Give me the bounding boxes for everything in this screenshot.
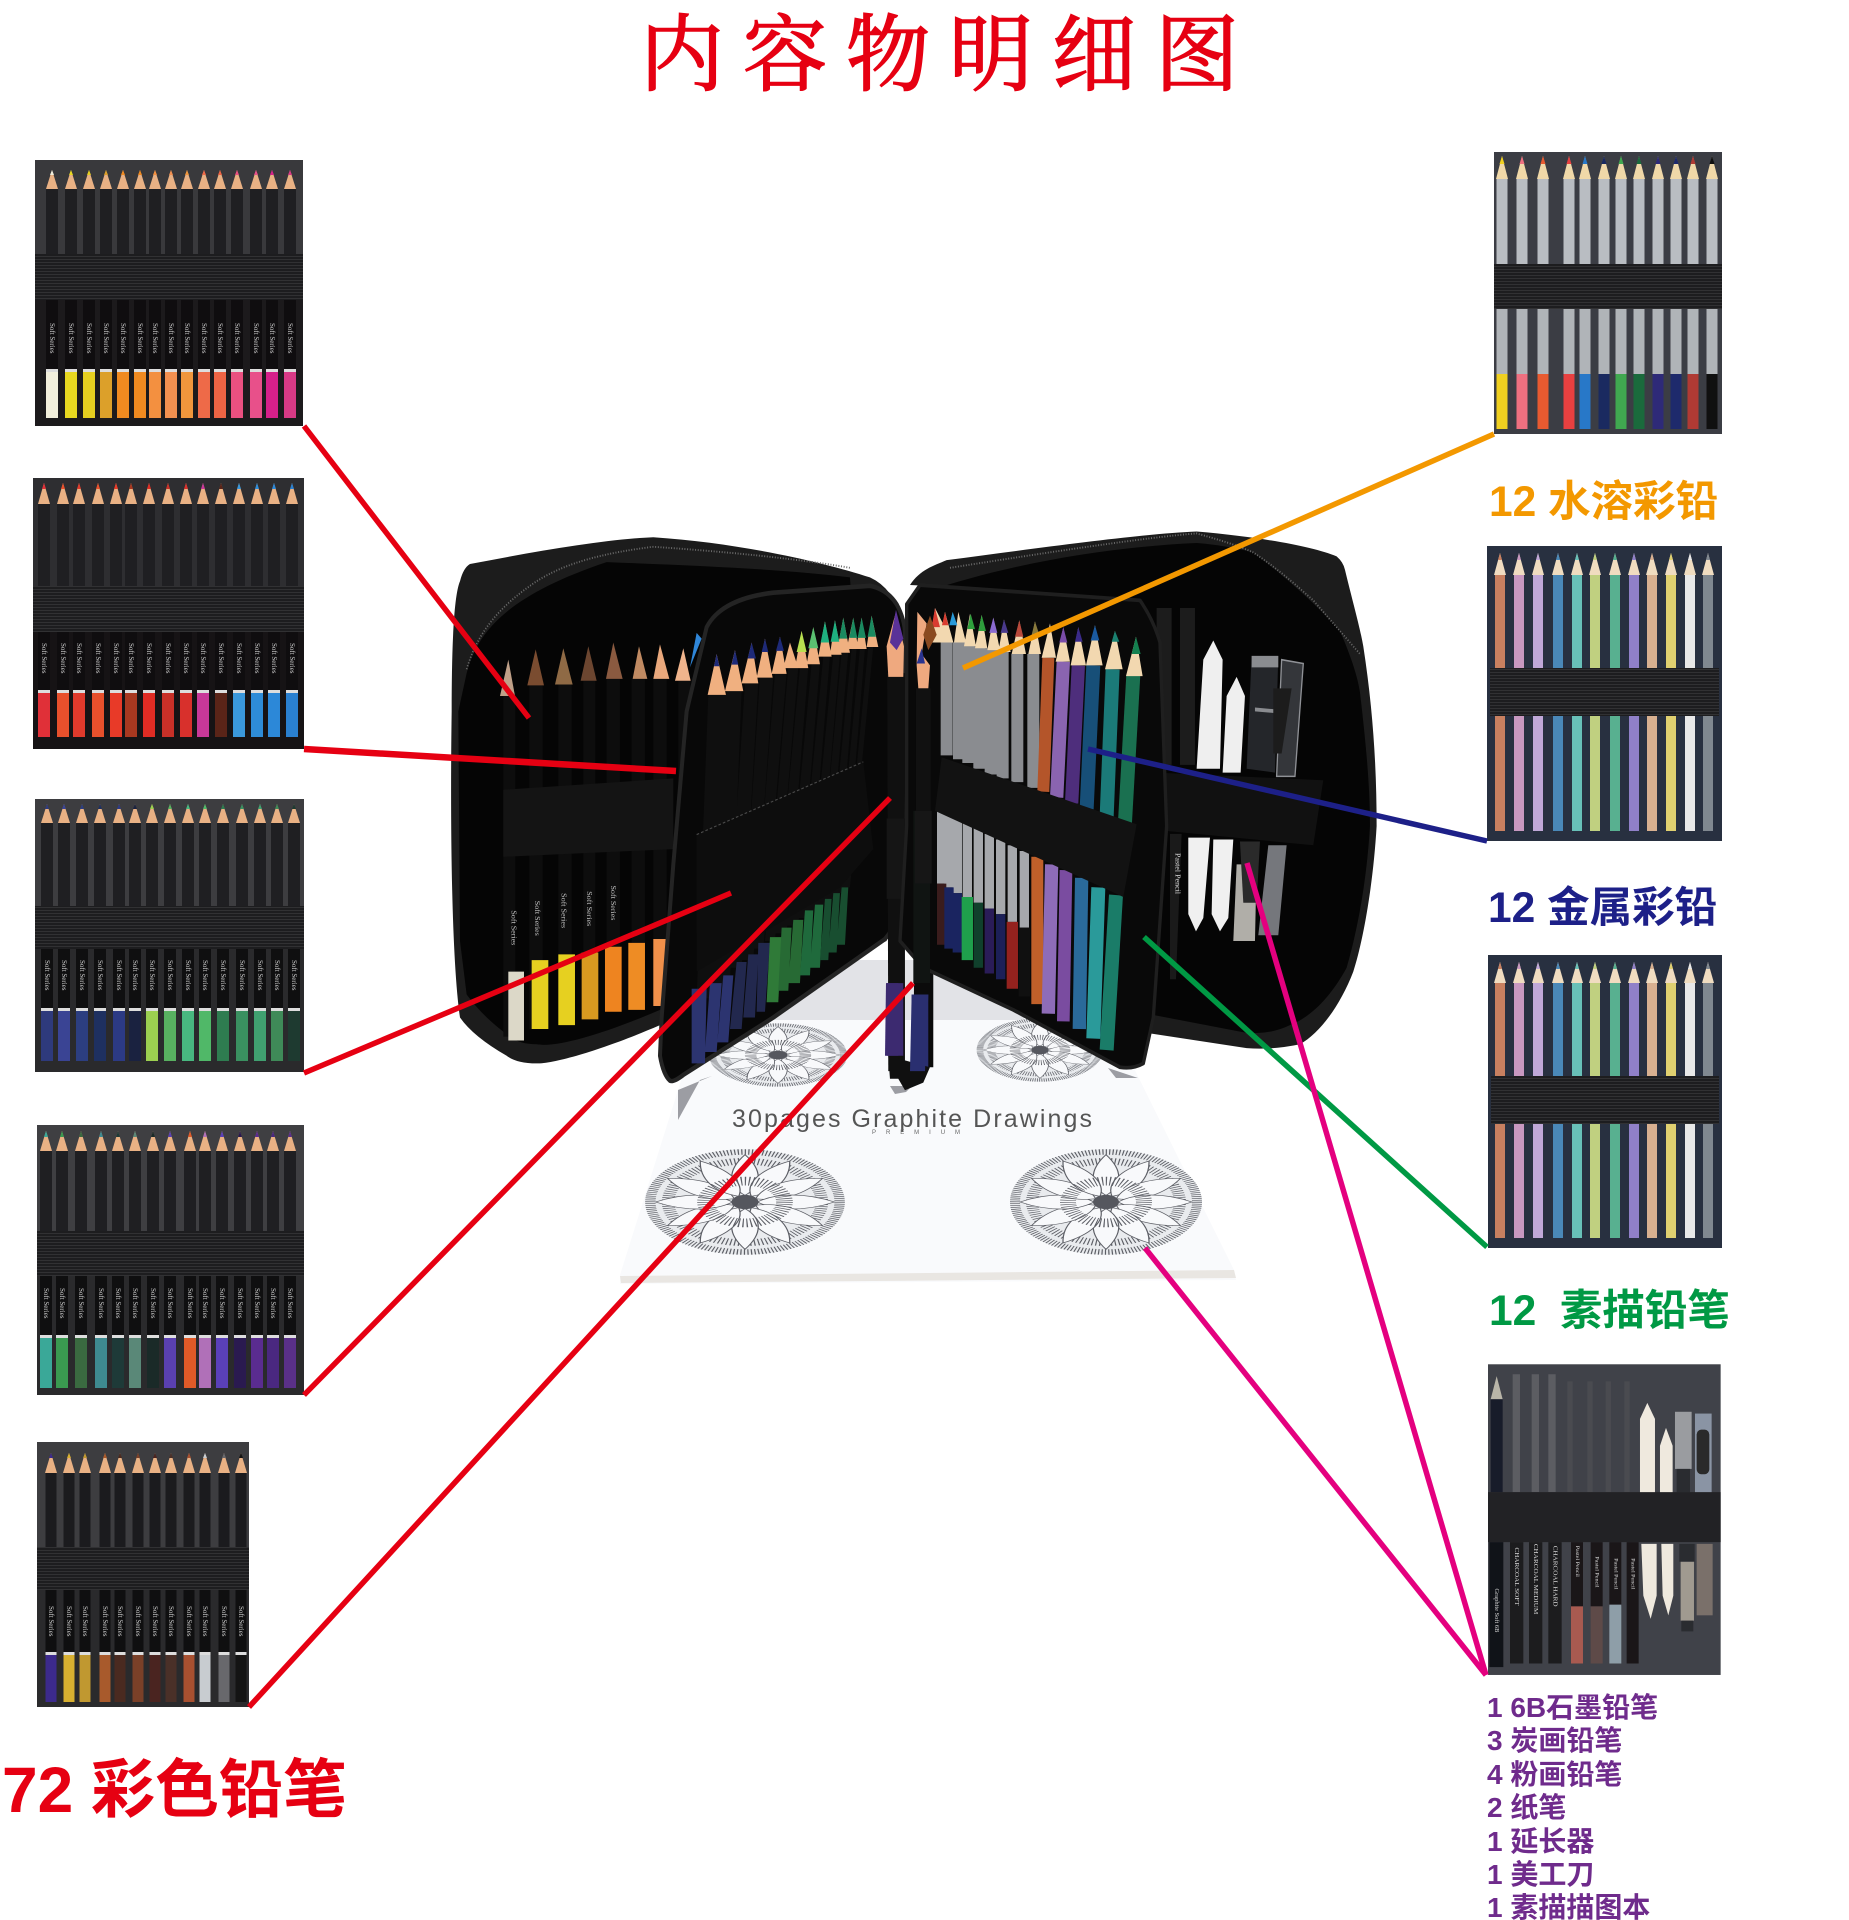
pencil labels: Soft Series	[40, 643, 48, 674]
panel: sketch tools	[1488, 1364, 1721, 1675]
case back	[451, 537, 897, 1063]
pencil labels: Soft Series	[114, 1288, 122, 1319]
title: 内容物明细图	[640, 10, 1258, 103]
tools compartment	[1152, 608, 1303, 979]
pencil labels: Soft Series	[201, 960, 209, 991]
pencil labels: Soft Series	[201, 1606, 209, 1637]
pencil labels: Soft Series	[81, 1606, 89, 1637]
paper stumps	[1640, 1403, 1673, 1619]
list: sketch tools contents: 1 延长器	[1487, 1826, 1594, 1857]
elastic band	[35, 254, 303, 300]
pencil labels: Soft Series	[166, 960, 174, 991]
pencil case: left side	[451, 537, 940, 1090]
pastel pencils: Pastel Pencil	[1574, 1546, 1580, 1577]
label: 12 metallic pencils: 12 金属彩铅	[1488, 885, 1717, 932]
panel: colored pencils teal to purple	[37, 1125, 304, 1395]
elastic band	[33, 586, 304, 632]
pencil labels: Soft Series	[286, 323, 294, 354]
panel: metallic pencils	[1487, 546, 1722, 841]
label: 12 watercolor pencils: 12 水溶彩铅	[1489, 479, 1718, 526]
spine pencil	[885, 811, 932, 1071]
pencil labels	[40, 643, 296, 674]
craft knife	[1695, 1414, 1713, 1615]
elastic band	[1488, 1492, 1721, 1542]
pencil labels: Soft Series	[236, 1288, 244, 1319]
leader line: set 5 to case	[249, 983, 913, 1707]
graphite pencil: Graphite Soft 6B	[1493, 1589, 1500, 1632]
pencil labels: Soft Series	[219, 960, 227, 991]
center spine pencils	[887, 610, 940, 1090]
charcoal pencils: CHARCOAL SOFT	[1513, 1547, 1520, 1606]
pencil labels: Soft Series	[201, 1288, 209, 1319]
pencil labels: Soft Series	[115, 960, 123, 991]
case back	[910, 531, 1377, 1049]
pencil labels: Soft Series	[288, 643, 296, 674]
charcoal pencils	[1510, 1374, 1562, 1664]
pencil labels: Soft Series	[186, 1288, 194, 1319]
panel: colored pencils red to blue	[33, 478, 304, 749]
pencil labels	[48, 323, 294, 354]
back pencils: Soft Series	[585, 891, 593, 926]
pencil labels: Soft Series	[256, 960, 264, 991]
flap lower pencils	[942, 811, 1116, 1050]
label: 12 sketch pencils: 12 素描铅笔	[1489, 1288, 1730, 1335]
mandala: bottom right	[1010, 1149, 1202, 1255]
pencil labels: Soft Series	[185, 1606, 193, 1637]
pencil labels: Soft Series	[47, 1606, 55, 1637]
pencil labels: Soft Series	[286, 1288, 294, 1319]
pencil extender	[1675, 1412, 1695, 1631]
front flap	[900, 585, 1167, 1068]
pencils	[38, 483, 298, 737]
pencil labels	[47, 1606, 245, 1637]
zipper	[950, 533, 1360, 654]
pastel pencils	[1567, 1381, 1639, 1664]
pencil labels: Soft Series	[182, 643, 190, 674]
pencil labels: Soft Series	[149, 1288, 157, 1319]
pastel pencils: Pastel Pencil	[1630, 1558, 1636, 1590]
pencil labels: Soft Series	[200, 323, 208, 354]
pencil labels: Soft Series	[238, 960, 246, 991]
pencil labels: Soft Series	[252, 323, 260, 354]
panel: colored pencils blue to green	[35, 799, 304, 1072]
pencil labels: Soft Series	[112, 643, 120, 674]
pencil labels: Soft Series	[166, 1288, 174, 1319]
pencil labels: Soft Series	[148, 960, 156, 991]
list: sketch tools contents: 3 炭画铅笔	[1487, 1725, 1622, 1756]
pencil labels: Soft Series	[78, 960, 86, 991]
pencil labels: Soft Series	[220, 1606, 228, 1637]
panel: watercolor pencils	[1494, 152, 1722, 434]
pencil labels: Soft Series	[136, 323, 144, 354]
pencils	[46, 170, 296, 418]
flap pencils	[692, 616, 878, 1063]
pencil case: right side	[885, 531, 1377, 1071]
list: sketch tools contents: 2 纸笔	[1487, 1792, 1566, 1823]
leader line: set 4 to case	[304, 798, 890, 1395]
back pencils: Soft Series	[510, 910, 518, 945]
elastic band	[1491, 1076, 1719, 1124]
label: 72 colored pencils: 72 彩色铅笔	[2, 1754, 347, 1826]
pencils	[1496, 156, 1718, 429]
pencil labels: Soft Series	[151, 323, 159, 354]
flap upper pencil tips	[916, 608, 1143, 811]
panel: colored pencils yellow to pink	[35, 160, 303, 426]
back pencils: Soft Series	[609, 885, 617, 921]
tools compartment: Pastel Pencil	[1173, 853, 1182, 894]
pastel pencils: Pastel Pencil	[1594, 1556, 1600, 1588]
pencil labels: Soft Series	[75, 643, 83, 674]
elastic band	[37, 1231, 304, 1276]
pencil labels: Soft Series	[233, 323, 241, 354]
pencil labels: Soft Series	[270, 643, 278, 674]
pencil labels: Soft Series	[218, 1288, 226, 1319]
list: sketch tools contents: 1 美工刀	[1487, 1859, 1594, 1890]
pencil labels: Soft Series	[131, 960, 139, 991]
flap elastic band	[697, 762, 873, 972]
mandala: bottom left	[645, 1149, 845, 1255]
pencil labels: Soft Series	[269, 1288, 277, 1319]
leader line: metallic	[1088, 749, 1487, 841]
pencil labels: Soft Series	[127, 643, 135, 674]
pencils	[1494, 962, 1714, 1238]
elastic band	[37, 1547, 249, 1590]
pencil labels: Soft Series	[102, 323, 110, 354]
back elastic band	[503, 778, 673, 857]
pencil labels: Soft Series	[184, 960, 192, 991]
pencil labels: Soft Series	[217, 643, 225, 674]
elastic band	[1494, 264, 1722, 309]
pencil labels: Soft Series	[164, 643, 172, 674]
leader line: set 3 to case	[304, 893, 731, 1073]
pencil labels: Soft Series	[85, 323, 93, 354]
pencil labels	[43, 960, 298, 991]
pencil labels: Soft Series	[183, 323, 191, 354]
book title: 30pages Graphite Drawings	[732, 1105, 1092, 1133]
panel: sketch pencils	[1488, 955, 1722, 1248]
pencil labels: Soft Series	[290, 960, 298, 991]
graphite pencil	[1489, 1376, 1503, 1667]
pencil labels: Soft Series	[167, 1606, 175, 1637]
pencil labels: Soft Series	[97, 1288, 105, 1319]
mandala: top right	[977, 1018, 1103, 1082]
pencils	[40, 1131, 296, 1388]
pencil labels: Soft Series	[237, 1606, 245, 1637]
pencil labels: Soft Series	[134, 1606, 142, 1637]
pencil labels: Soft Series	[96, 960, 104, 991]
flap band stitching	[697, 762, 863, 835]
pastel pencils: Pastel Pencil	[1612, 1558, 1618, 1590]
leader line: set 2 to case	[304, 749, 676, 771]
sketchbook	[620, 960, 1236, 1284]
pencil labels: Soft Series	[60, 960, 68, 991]
elastic band	[1490, 668, 1719, 716]
pencil labels: Soft Series	[119, 323, 127, 354]
pencil labels: Soft Series	[235, 643, 243, 674]
pencil labels: Soft Series	[59, 643, 67, 674]
pencil labels: Soft Series	[65, 1606, 73, 1637]
leader line: tools to sketchbook	[1145, 1248, 1486, 1675]
pencil labels: Soft Series	[42, 1288, 50, 1319]
back pencils	[500, 633, 702, 1040]
pencils	[1494, 553, 1714, 831]
pencil labels: Soft Series	[216, 323, 224, 354]
pencil labels: Soft Series	[199, 643, 207, 674]
flap upper pencils	[947, 642, 1133, 822]
back pencils: Soft Series	[560, 893, 568, 928]
pencil labels: Soft Series	[131, 1288, 139, 1319]
leader line: watercolor	[963, 434, 1494, 668]
elastic band	[35, 906, 304, 949]
back pencils: Soft Series	[533, 901, 542, 936]
pencil labels: Soft Series	[67, 323, 75, 354]
pencil labels: Soft Series	[268, 323, 276, 354]
leader line: sketch pencils	[1144, 937, 1487, 1247]
middle flap	[660, 586, 905, 1081]
pencil labels: Soft Series	[101, 1606, 109, 1637]
flap elastic band	[935, 757, 1137, 897]
leader line: tools to case	[1247, 863, 1486, 1675]
pencils	[41, 804, 300, 1061]
pencils	[45, 1453, 247, 1702]
pencil labels: Soft Series	[273, 960, 281, 991]
list: sketch tools contents: 4 粉画铅笔	[1487, 1759, 1622, 1790]
panel: colored pencils ochre to grey	[37, 1442, 249, 1707]
pencil labels: Soft Series	[48, 323, 56, 354]
pencil labels: Soft Series	[58, 1288, 66, 1319]
pencil labels: Soft Series	[151, 1606, 159, 1637]
list: sketch tools contents: 1 6B石墨铅笔	[1487, 1692, 1658, 1723]
leader line: set 1 to case	[304, 426, 529, 718]
pencil labels: Soft Series	[43, 960, 51, 991]
charcoal pencils: CHARCOAL MEDIUM	[1532, 1544, 1539, 1614]
pencil labels: Soft Series	[145, 643, 153, 674]
pencil labels: Soft Series	[253, 1288, 261, 1319]
pencil labels: Soft Series	[116, 1606, 124, 1637]
pencil labels	[42, 1288, 294, 1319]
mandala: top left	[709, 1023, 847, 1087]
list: sketch tools contents	[1487, 1692, 1658, 1920]
charcoal pencils: CHARCOAL HARD	[1552, 1546, 1558, 1607]
pencil labels: Soft Series	[253, 643, 261, 674]
pencil labels: Soft Series	[94, 643, 102, 674]
pencil labels: Soft Series	[167, 323, 175, 354]
tools elastic band	[1157, 773, 1323, 845]
pencil labels: Soft Series	[77, 1288, 85, 1319]
book subtitle: PREMIUM	[872, 1130, 960, 1136]
